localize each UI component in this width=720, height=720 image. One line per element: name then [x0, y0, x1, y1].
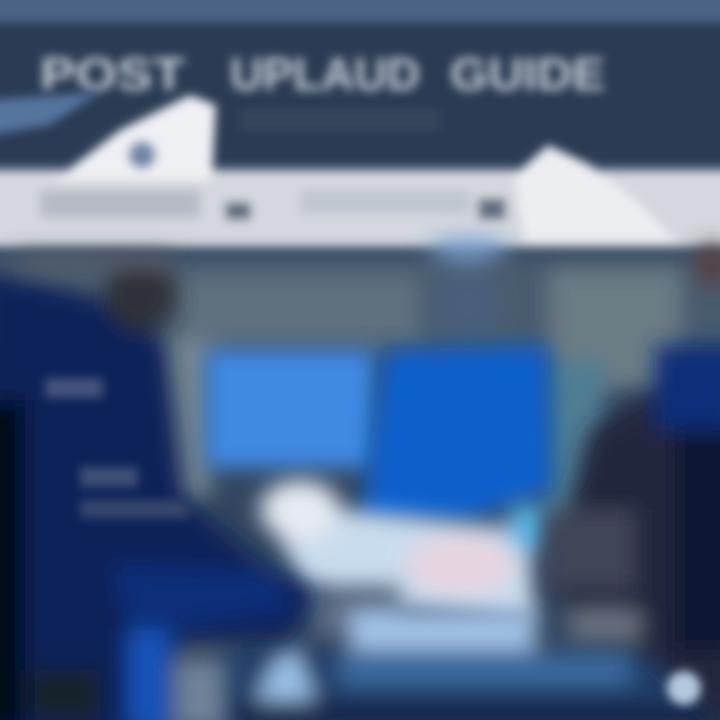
bottom area: [220, 585, 720, 720]
operating room midground: [0, 256, 720, 530]
left text block: [45, 378, 188, 518]
central surgeon head: [428, 237, 508, 341]
title: GUIDE: [450, 48, 605, 100]
title: UPLAUD: [230, 48, 420, 100]
header band: [0, 0, 720, 162]
operating table: [260, 480, 545, 620]
central blue gown: [360, 345, 552, 525]
left surgeon figure: [0, 254, 320, 720]
title: POST: [40, 48, 185, 100]
right surgeon figures: [545, 243, 720, 720]
title: [40, 48, 605, 100]
bottom-right light spot: [667, 671, 701, 705]
left light blue drape: [205, 350, 375, 468]
white banner with peaks: [0, 92, 720, 248]
